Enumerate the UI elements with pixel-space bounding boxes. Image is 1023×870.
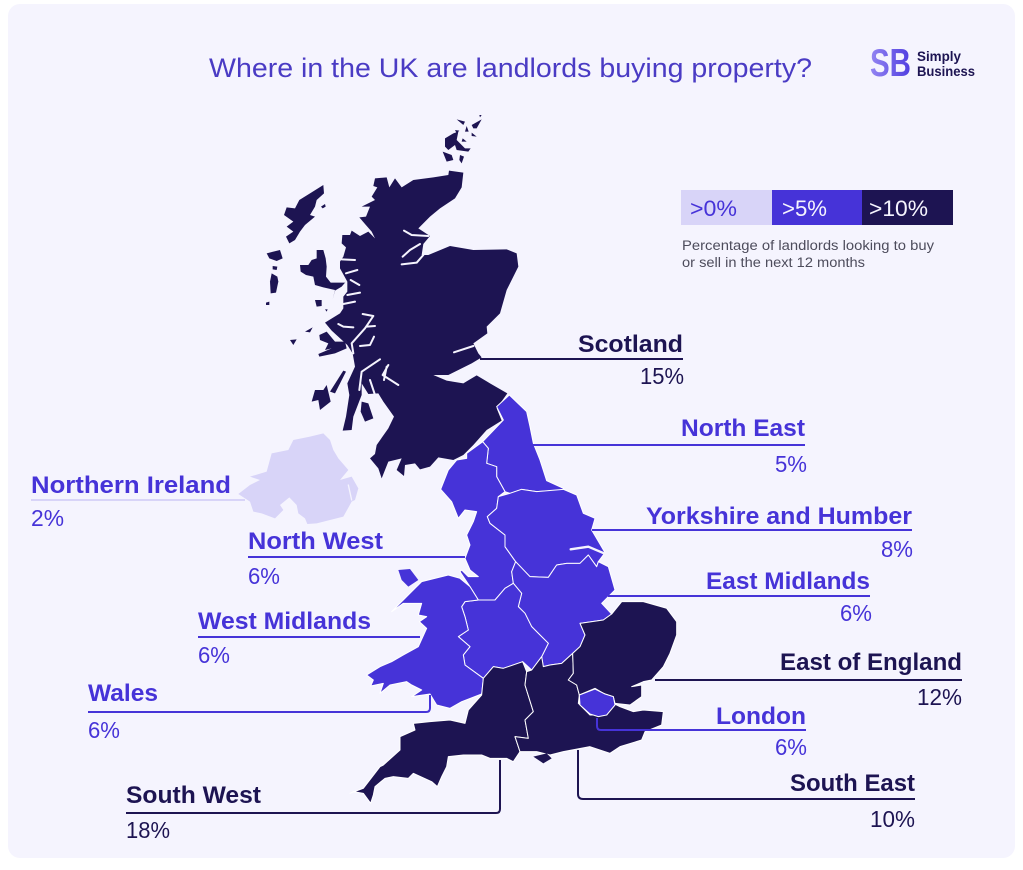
region: South East xyxy=(515,653,663,755)
region: West Midlands xyxy=(458,583,548,678)
legend: or sell in the next 12 months xyxy=(682,255,865,270)
label: Northern Ireland: Northern Ireland xyxy=(31,472,231,499)
Outer Hebrides and Inner Hebrides xyxy=(266,185,373,422)
region: North East xyxy=(483,395,563,493)
label: East of England xyxy=(655,649,962,710)
region: East of England xyxy=(568,602,677,705)
label: East of England: 12% xyxy=(917,684,962,710)
label: South East: South East xyxy=(790,770,915,797)
map: Northern Ireland xyxy=(238,433,358,524)
logo: Simply Business xyxy=(870,42,975,85)
region: Wales xyxy=(367,575,483,708)
region: East Midlands xyxy=(512,555,615,667)
region: Yorkshire and Humber xyxy=(487,489,605,577)
label: East of England: East of England xyxy=(780,649,962,676)
sea lochs xyxy=(338,231,473,395)
label: South East: 10% xyxy=(870,806,915,832)
label: North East xyxy=(533,415,807,477)
label: West Midlands xyxy=(198,608,420,668)
label: Wales: 6% xyxy=(88,717,120,743)
label: Yorkshire and Humber: Yorkshire and Humber xyxy=(646,503,912,530)
label: North West: North West xyxy=(248,528,383,555)
label: North West xyxy=(248,528,465,589)
map: England and Wales regions xyxy=(350,395,677,803)
label: London: 6% xyxy=(775,734,807,760)
Orkney and Shetland xyxy=(443,115,482,163)
Humber estuary xyxy=(571,547,604,553)
legend: >0% xyxy=(690,196,737,221)
label: Scotland xyxy=(480,331,684,389)
label: North West: 6% xyxy=(248,563,280,589)
title: Where in the UK are landlords buying property? xyxy=(209,53,812,83)
label: East Midlands: 6% xyxy=(840,600,872,626)
label: London xyxy=(597,703,807,760)
label: West Midlands: West Midlands xyxy=(198,608,371,635)
region: South West xyxy=(350,662,533,803)
label: Wales xyxy=(88,680,430,743)
region: London xyxy=(579,689,615,717)
region: North West xyxy=(441,442,516,600)
label: North East: North East xyxy=(681,415,805,442)
label: Yorkshire and Humber: 8% xyxy=(881,536,913,562)
label: South West: South West xyxy=(126,782,261,809)
label: South West xyxy=(126,760,500,843)
label: North East: 5% xyxy=(775,451,807,477)
label: Scotland: Scotland xyxy=(578,331,683,358)
legend xyxy=(681,190,953,270)
label: Scotland: 15% xyxy=(640,363,684,389)
logo: Simply Business: Simply xyxy=(917,48,961,64)
legend: >10% xyxy=(869,196,928,221)
label: Yorkshire and Humber xyxy=(592,503,913,562)
label: Wales: Wales xyxy=(88,680,158,707)
label: East Midlands xyxy=(608,568,872,626)
Anglesey xyxy=(398,569,418,587)
logo: Simply Business: Business xyxy=(917,63,975,79)
legend: Percentage of landlords looking to buy xyxy=(682,238,934,253)
logo: Simply Business: SB xyxy=(870,42,911,85)
label: West Midlands: 6% xyxy=(198,642,230,668)
label: London: London xyxy=(716,703,806,730)
legend: >5% xyxy=(782,196,827,221)
label: South East xyxy=(578,750,915,832)
label: South West: 18% xyxy=(126,817,170,843)
map: Scotland xyxy=(266,115,518,478)
label: Northern Ireland xyxy=(31,472,245,531)
label: East Midlands: East Midlands xyxy=(706,568,870,595)
Isle of Wight xyxy=(533,753,552,763)
label: Northern Ireland: 2% xyxy=(31,505,64,531)
